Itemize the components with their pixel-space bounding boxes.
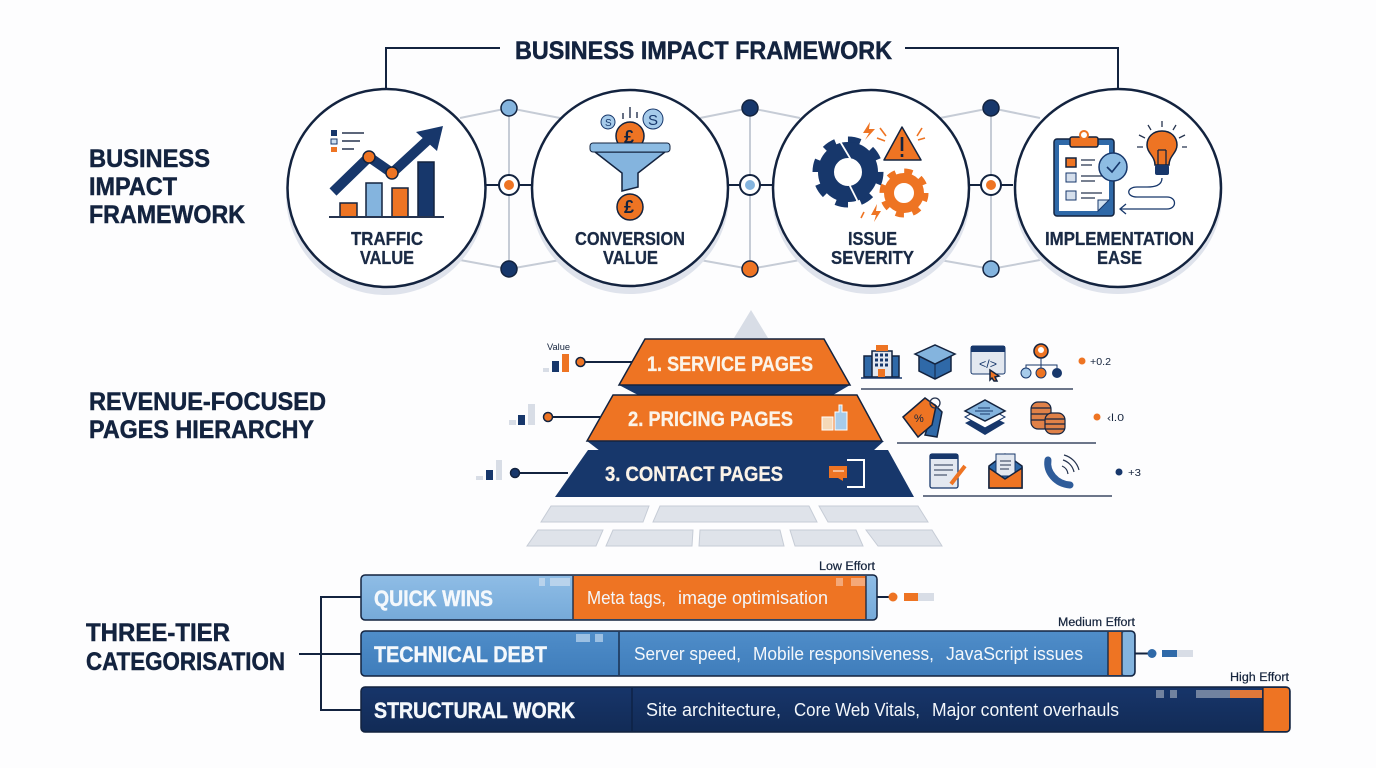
heading: revenue-focused pages hierarchy: REVENUE-FOCUSED bbox=[89, 388, 326, 416]
heading: business impact framework: FRAMEWORK bbox=[89, 201, 245, 229]
tier 2: pricing pages: 2. PRICING PAGES bbox=[628, 408, 793, 431]
tier: quick wins: Meta tags, bbox=[587, 588, 666, 608]
tier: structural work: STRUCTURAL WORK bbox=[374, 698, 575, 723]
icon: price tags: % bbox=[914, 413, 924, 425]
icon: envelope bbox=[989, 454, 1022, 488]
icon: org chart bbox=[1021, 344, 1062, 378]
icon: office building bbox=[861, 345, 902, 378]
tier 2: pricing pages bbox=[587, 385, 882, 441]
icon: conversion funnel with coins bbox=[590, 107, 670, 220]
icon: stacked layers bbox=[965, 400, 1005, 435]
icon row: pricing pages bbox=[897, 398, 1096, 443]
tier: quick wins bbox=[361, 561, 934, 620]
icon: traffic growth chart bbox=[329, 126, 444, 217]
tier: structural work: Core Web Vitals, bbox=[794, 700, 920, 720]
icon: code browser: </> bbox=[979, 357, 997, 371]
heading: business impact framework: BUSINESS bbox=[89, 145, 210, 173]
title: BUSINESS IMPACT FRAMEWORK bbox=[515, 37, 892, 65]
icon: gears and warning bbox=[817, 122, 925, 222]
tier: quick wins: QUICK WINS bbox=[374, 586, 493, 611]
tier: structural work: Site architecture, bbox=[646, 700, 781, 720]
icon: form and pencil bbox=[930, 454, 965, 488]
heading: business impact framework bbox=[89, 145, 245, 229]
tier: technical debt: JavaScript issues bbox=[946, 644, 1083, 664]
tier: technical debt bbox=[361, 617, 1193, 676]
icon: coin stacks bbox=[1031, 402, 1065, 434]
icon: conversion funnel with coins: S bbox=[648, 112, 658, 129]
panel: traffic value: VALUE bbox=[360, 248, 414, 268]
heading: three-tier categorisation: THREE-TIER bbox=[86, 619, 230, 647]
tier 3: contact pages: 3. CONTACT PAGES bbox=[605, 463, 783, 486]
tier: structural work: High Effort bbox=[1230, 672, 1290, 684]
value delta: contact pages: +3 bbox=[1128, 467, 1141, 479]
icon row: service pages bbox=[861, 344, 1073, 389]
value indicator: pricing pages bbox=[509, 404, 600, 425]
pyramid bbox=[527, 310, 942, 546]
panel: conversion value bbox=[531, 90, 729, 294]
effort indicator: low bbox=[877, 592, 934, 602]
heading: three-tier categorisation: CATEGORISATION bbox=[86, 648, 285, 676]
icon: price tags bbox=[903, 398, 942, 437]
panel: traffic value bbox=[286, 89, 486, 295]
value delta: pricing pages bbox=[1094, 412, 1124, 424]
icon row: contact pages bbox=[923, 454, 1112, 496]
heading: three-tier categorisation bbox=[86, 619, 285, 676]
tier: technical debt: Medium Effort bbox=[1058, 617, 1136, 629]
icon: checklist and lightbulb bbox=[1054, 121, 1187, 216]
tier: technical debt: TECHNICAL DEBT bbox=[374, 642, 547, 667]
tier: quick wins: image optimisation bbox=[678, 588, 828, 608]
icon: conversion funnel with coins: £ bbox=[624, 197, 634, 217]
tier 3: contact pages bbox=[555, 441, 914, 497]
tier bracket connector bbox=[299, 597, 361, 710]
icon: phone with signal bbox=[1048, 455, 1079, 485]
value indicator: contact pages bbox=[476, 460, 568, 480]
title bbox=[386, 37, 1118, 88]
panel: implementation ease: IMPLEMENTATION bbox=[1045, 229, 1194, 249]
panel: implementation ease: EASE bbox=[1097, 248, 1142, 268]
value delta: pricing pages: ‹l.0 bbox=[1107, 412, 1124, 424]
network connectors between circles bbox=[460, 100, 1040, 277]
heading: revenue-focused pages hierarchy: PAGES HIERARCHY bbox=[89, 416, 314, 444]
panel: conversion value: CONVERSION bbox=[575, 229, 685, 249]
base rows of grey blocks bbox=[527, 506, 942, 546]
value delta: service pages: +0.2 bbox=[1090, 356, 1111, 368]
tier: structural work bbox=[361, 672, 1290, 732]
tier 1: service pages bbox=[619, 339, 850, 385]
value delta: service pages bbox=[1078, 356, 1111, 368]
tier: technical debt: Server speed, bbox=[634, 644, 741, 664]
tier 1: service pages: 1. SERVICE PAGES bbox=[647, 353, 813, 376]
icon: conversion funnel with coins: £ bbox=[624, 127, 634, 147]
value indicator: service pages: Value bbox=[547, 342, 570, 353]
icon: open box bbox=[915, 345, 955, 379]
panel: issue severity bbox=[772, 90, 970, 294]
effort indicator: medium bbox=[1135, 649, 1193, 658]
value indicator: service pages bbox=[543, 342, 632, 372]
panel: issue severity: SEVERITY bbox=[831, 248, 914, 268]
icon: conversion funnel with coins: S bbox=[605, 118, 612, 129]
heading: revenue-focused pages hierarchy bbox=[89, 388, 326, 444]
panel: issue severity: ISSUE bbox=[848, 229, 897, 249]
value delta: contact pages bbox=[1116, 467, 1141, 479]
panel: traffic value: TRAFFIC bbox=[351, 229, 423, 249]
panel: implementation ease bbox=[1014, 89, 1222, 294]
tier: technical debt: Mobile responsiveness, bbox=[753, 644, 934, 664]
panel: conversion value: VALUE bbox=[603, 248, 658, 268]
icon: code browser bbox=[971, 346, 1005, 381]
tier: structural work: Major content overhauls bbox=[932, 700, 1119, 720]
heading: business impact framework: IMPACT bbox=[89, 173, 177, 201]
tier: quick wins: Low Effort bbox=[819, 561, 876, 573]
